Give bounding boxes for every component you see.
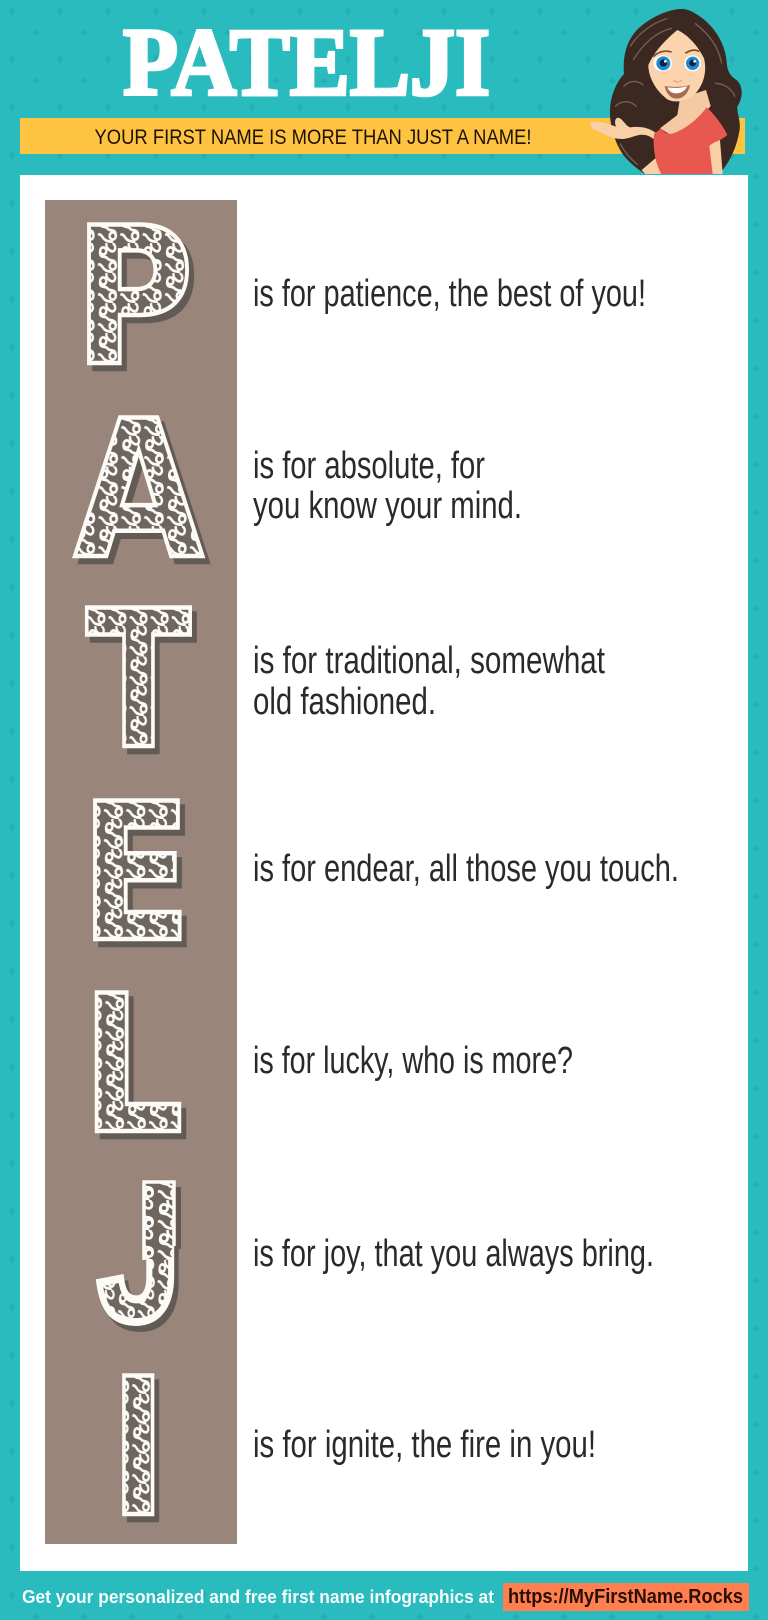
title: PATELJI [123, 8, 490, 116]
line: A: you know your mind. [253, 485, 522, 527]
footer text: Get your personalized and free first name infographics at [22, 1586, 494, 1607]
letter P: P [74, 187, 194, 408]
line: T: old fashioned. [253, 681, 436, 723]
neck [660, 90, 711, 135]
line: T [253, 640, 605, 723]
footer link badge: https://MyFirstName.Rocks [508, 1586, 743, 1608]
eyebrows [653, 50, 699, 57]
dress [654, 107, 727, 174]
letter L: L [82, 956, 184, 1176]
letter A: A [74, 381, 203, 602]
eyes [653, 55, 701, 71]
face [648, 30, 705, 101]
banner [20, 118, 745, 154]
mouth [665, 85, 690, 99]
line: P: is for patience, the best of you! [253, 273, 646, 315]
left column [45, 187, 237, 1559]
banner slogan: YOUR FIRST NAME IS MORE THAN JUST A NAME! [94, 125, 532, 149]
letter J: J [97, 1139, 182, 1363]
letter I: I [110, 1337, 167, 1559]
line: J: is for joy, that you always bring. [253, 1233, 654, 1275]
illustration: woman presenting [590, 9, 742, 174]
J stem rebuild [118, 1172, 186, 1260]
line: A: is for absolute, for [253, 445, 485, 487]
forearm at bottom [642, 157, 663, 174]
line: T: is for traditional, somewhat [253, 640, 605, 682]
letter T: T [86, 570, 191, 791]
line: L: is for lucky, who is more? [253, 1040, 573, 1082]
line: I: is for ignite, the fire in you! [253, 1424, 596, 1466]
arm and hand [590, 118, 657, 140]
letter E: E [80, 763, 192, 984]
line: A [253, 445, 522, 527]
nose [673, 80, 682, 82]
